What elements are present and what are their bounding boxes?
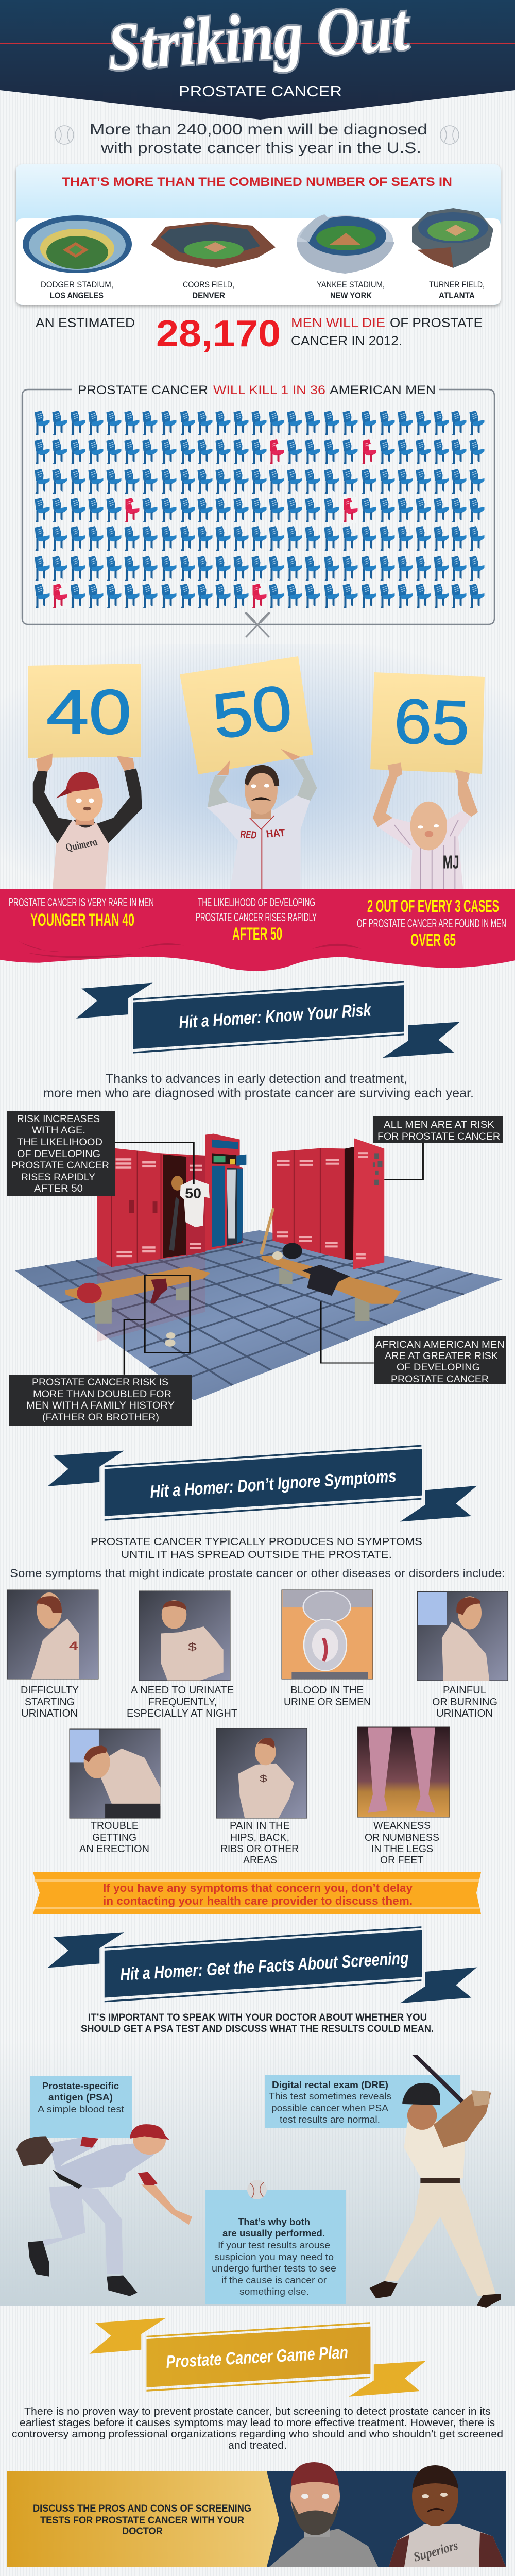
text: speak with your doctor: [81, 2012, 434, 2035]
box: why both: undergo further tests to see: [212, 2263, 336, 2274]
stadium labels: DENVER: [192, 291, 225, 300]
text: over 65: OVER 65: [410, 930, 456, 950]
panel: discuss with your doctor: [7, 2462, 506, 2567]
text: no symptoms statement: UNTIL IT HAS SPREAD OUTSIDE THE PROSTATE.: [121, 1549, 392, 1561]
icon: baseball: [247, 2180, 267, 2199]
symptom: weakness in legs or feet: WEAKNESS: [373, 1820, 431, 1832]
figure: older man: [373, 762, 478, 889]
symptom: blood in urine: [282, 1590, 373, 1708]
symptom: pain in hips, back, ribs: AREAS: [243, 1855, 277, 1866]
symptom: need to urinate frequently: [127, 1591, 237, 1719]
ribbon: age facts: [0, 889, 515, 971]
callout: risk increases with age: RISK INCREASES: [17, 1114, 100, 1125]
callout: risk increases with age: PROSTATE CANCER: [11, 1160, 109, 1171]
symptom: painful urination: URINATION: [436, 1708, 493, 1719]
text: after 50: THE LIKELIHOOD OF DEVELOPING: [198, 895, 315, 909]
callout: family history: MORE THAN DOUBLED FOR: [33, 1389, 171, 1400]
callout: risk increases with age: RISES RAPIDLY: [21, 1172, 95, 1183]
callout: family history: (FATHER OR BROTHER): [42, 1412, 159, 1423]
connector lines: [115, 1142, 423, 1375]
callout: African American men: ARE AT GREATER RISK: [385, 1351, 498, 1362]
symptom: trouble getting an erection: GETTING: [92, 1832, 136, 1843]
text: no symptoms statement: [10, 1536, 505, 1580]
box: why both: are usually performed.: [222, 2228, 325, 2239]
symptom image: [282, 1590, 373, 1679]
jersey: number 50: [180, 1179, 210, 1227]
text: over 65: [357, 896, 506, 950]
text: survival intro: [43, 1072, 474, 1100]
banner: Get the Facts About Screening: Hit a Homer: Get the Facts About Screening: [119, 1948, 409, 1985]
text: game plan paragraph: controversy among professional organizations regarding who should and who shouldn’t get screened: [12, 2429, 503, 2440]
statistic: 28,170 deaths: [36, 313, 483, 354]
callout: African American men: PROSTATE CANCER: [391, 1374, 489, 1385]
callout: contact your provider: If you have any symptoms that concern you, don’t delay: [103, 1882, 413, 1894]
symptom image: $: [260, 1773, 267, 1784]
text: game plan paragraph: There is no proven way to prevent prostate cancer, but screening to detect prostate cancer in its: [24, 2406, 491, 2417]
text: no symptoms statement: PROSTATE CANCER TYPICALLY PRODUCES NO SYMPTOMS: [91, 1536, 422, 1548]
callout: African American men: [374, 1336, 506, 1385]
callout: family history: MEN WITH A FAMILY HISTORY: [26, 1400, 175, 1411]
text: game plan paragraph: earliest stages before it causes symptoms may lead to more effective treatment. However, there is: [20, 2417, 495, 2429]
callout: risk increases with age: AFTER 50: [34, 1183, 83, 1194]
stadium labels: DODGER STADIUM,: [41, 280, 113, 290]
box: why both: That’s why both: [238, 2217, 310, 2227]
symptom: painful urination: PAINFUL: [443, 1685, 486, 1696]
text: game plan paragraph: and treated.: [228, 2440, 287, 2451]
box: DRE: test results are normal.: [280, 2114, 380, 2125]
box: why both: [205, 2180, 346, 2304]
symptom image: [70, 1729, 160, 1818]
panel heading: THAT’S MORE THAN THE COMBINED NUMBER OF SEATS IN: [62, 175, 452, 189]
box: why both: suspicion you may need to: [214, 2252, 334, 2262]
banner: Prostate Cancer Game Plan: [89, 2318, 426, 2397]
symptom: need to urinate frequently: ESPECIALLY AT NIGHT: [127, 1708, 237, 1719]
statistic: 28,170 deaths: 28,170: [156, 313, 281, 354]
header: [0, 0, 515, 120]
stadium: Coors: [151, 222, 276, 268]
panel: age signs and men: [0, 644, 515, 889]
symptom: pain in hips, back, ribs: HIPS, BACK,: [230, 1832, 289, 1843]
panel text: [33, 2503, 251, 2537]
text: under 40: YOUNGER THAN 40: [30, 910, 134, 930]
symptom: weakness in legs or feet: [357, 1727, 450, 1866]
statistic: 28,170 deaths: MEN WILL DIE: [291, 316, 385, 330]
text: survival intro: more men who are diagnosed with prostate cancer are surviving each year.: [43, 1086, 474, 1100]
sign: 40: [28, 664, 141, 758]
chart heading: PROSTATE CANCER: [78, 383, 208, 397]
text: after 50: [196, 895, 317, 944]
banner: Don't Ignore Symptoms: [47, 1445, 477, 1522]
callout: family history: PROSTATE CANCER RISK IS: [32, 1377, 168, 1388]
figure: man in Superiors shirt: Superiors: [412, 2538, 459, 2565]
banner: Know Your Risk: Hit a Homer: Know Your Risk: [178, 1000, 372, 1032]
symptom: painful urination: [417, 1591, 508, 1719]
text: after 50: AFTER 50: [232, 924, 282, 944]
statistic: 28,170 deaths: CANCER IN 2012.: [291, 334, 402, 348]
bat: [260, 1208, 274, 1255]
callout: risk increases with age: [7, 1111, 115, 1196]
sign: 50: 50: [209, 672, 296, 752]
stadium labels: [41, 280, 485, 300]
panel text: DISCUSS THE PROS AND CONS OF SCREENING: [33, 2503, 251, 2514]
stadium labels: LOS ANGELES: [50, 291, 104, 300]
callout: risk increases with age: OF DEVELOPING: [17, 1149, 100, 1160]
box: PSA: [30, 2076, 132, 2138]
statistic: 28,170 deaths: OF PROSTATE: [390, 316, 483, 330]
callout: all men at risk: FOR PROSTATE CANCER: [377, 1131, 500, 1142]
symptom: pain in hips, back, ribs: PAIN IN THE: [230, 1820, 290, 1832]
symptom: weakness in legs or feet: OR NUMBNESS: [365, 1832, 439, 1843]
stadium: Turner: [412, 208, 493, 268]
intro statement: More than 240,000 men will be diagnosed: [90, 121, 427, 138]
panel: stadium seats comparison: [16, 164, 501, 305]
callout: all men at risk: [373, 1116, 503, 1143]
figure: batter: [370, 2055, 501, 2308]
icon: baseball right: [440, 126, 459, 144]
lockers: blue tower: [205, 1133, 246, 1251]
symptom: blood in urine: URINE OR SEMEN: [284, 1697, 371, 1708]
box: PSA: A simple blood test: [38, 2104, 124, 2114]
illustration: locker room: [15, 1133, 503, 1400]
banner: Don't Ignore Symptoms: Hit a Homer: Don’t Ignore Symptoms: [149, 1466, 397, 1502]
stadium: Dodger: [23, 215, 132, 273]
stadium labels: COORS FIELD,: [183, 280, 234, 290]
symptom: pain in hips, back, ribs: RIBS OR OTHER: [220, 1843, 299, 1855]
intro statement: with prostate cancer this year in the U.S.: [100, 140, 421, 157]
box: PSA: antigen (PSA): [48, 2092, 113, 2103]
sign: 65: [370, 672, 485, 774]
panel: screening tests: [0, 2040, 515, 2308]
symptom: pain in hips, back, ribs: [216, 1728, 307, 1866]
sign: 65: 65: [393, 686, 471, 758]
seat pictogram: [35, 411, 484, 609]
jersey: number 50: 50: [185, 1185, 201, 1201]
symptom image: [139, 1591, 230, 1681]
floor: [15, 1230, 503, 1400]
figure: middle-aged man: HAT: [265, 827, 286, 840]
panel: 1 in 36 seat chart: [22, 383, 494, 637]
chart heading: [78, 383, 436, 397]
box: DRE: This test sometimes reveals: [269, 2091, 391, 2102]
figure: bearded man: [269, 2462, 378, 2567]
bench: right: [261, 1243, 401, 1321]
box: DRE: Digital rectal exam (DRE): [272, 2080, 388, 2090]
panel text: DOCTOR: [122, 2526, 163, 2537]
figure: man in Superiors shirt: [389, 2465, 506, 2567]
intro statement: [55, 121, 459, 157]
box: why both: something else.: [239, 2286, 309, 2297]
subtitle: PROSTATE CANCER: [179, 83, 342, 100]
figure: young man: Quimera: [63, 836, 99, 854]
text: game plan paragraph: [12, 2406, 503, 2451]
text: speak with your doctor: SHOULD GET A PSA TEST AND DISCUSS WHAT THE RESULTS COULD MEAN.: [81, 2024, 434, 2035]
symptom: painful urination: OR BURNING: [432, 1697, 497, 1708]
symptom: trouble getting an erection: AN ERECTION: [79, 1843, 149, 1855]
symptom: weakness in legs or feet: OR FEET: [380, 1855, 423, 1866]
chart heading: AMERICAN MEN: [330, 383, 436, 397]
icon: crossed bats: [246, 613, 269, 637]
panel text: TESTS FOR PROSTATE CANCER WITH YOUR: [40, 2515, 244, 2526]
callout: African American men: AFRICAN AMERICAN MEN: [375, 1340, 505, 1350]
callout: African American men: OF DEVELOPING: [397, 1362, 480, 1373]
text: after 50: PROSTATE CANCER RISES RAPIDLY: [196, 910, 317, 924]
symptom: trouble getting an erection: [70, 1729, 160, 1855]
symptom: need to urinate frequently: FREQUENTLY,: [148, 1697, 217, 1708]
bench: left: [65, 1266, 210, 1347]
symptom image: [417, 1591, 508, 1681]
stadium labels: ATLANTA: [439, 291, 475, 300]
statistic: 28,170 deaths: AN ESTIMATED: [36, 316, 135, 330]
chart heading: WILL KILL 1 IN 36: [213, 383, 325, 397]
box: DRE: possible cancer when PSA: [271, 2103, 388, 2113]
callout: contact your provider: [33, 1872, 481, 1914]
banner: Get the Facts About Screening: [47, 1926, 477, 2003]
figure: middle-aged man: [207, 749, 317, 889]
sign: 40: 40: [46, 677, 131, 747]
lockers: right bank: [272, 1138, 384, 1269]
banner: Prostate Cancer Game Plan: Prostate Cancer Game Plan: [165, 2343, 349, 2372]
symptom image: 4: [69, 1639, 78, 1652]
icon: baseball left: [55, 126, 74, 144]
box: why both: if the cause is cancer or: [221, 2275, 327, 2285]
figure: young man: [33, 753, 142, 889]
sign: 50: [180, 656, 313, 774]
box: DRE: [265, 2075, 460, 2128]
symptom: need to urinate frequently: A NEED TO URINATE: [131, 1685, 234, 1696]
callout: contact your provider: in contacting your health care provider to discuss them.: [103, 1894, 413, 1907]
symptom: weakness in legs or feet: IN THE LEGS: [371, 1843, 433, 1855]
text: survival intro: Thanks to advances in early detection and treatment,: [106, 1072, 407, 1086]
text: speak with your doctor: IT’S IMPORTANT TO SPEAK WITH YOUR DOCTOR ABOUT WHETHER YOU: [88, 2012, 427, 2023]
stadium labels: TURNER FIELD,: [429, 280, 485, 290]
figure: pitcher: [16, 2124, 192, 2296]
text: no symptoms statement: Some symptoms that might indicate prostate cancer or other diseases or disorders include:: [10, 1567, 505, 1580]
lockers: left bank: [97, 1146, 205, 1267]
symptom image: [357, 1727, 450, 1817]
symptom image: $: [188, 1641, 197, 1653]
symptom image: [216, 1728, 307, 1818]
callout: all men at risk: ALL MEN ARE AT RISK: [384, 1120, 494, 1130]
text: under 40: [9, 895, 154, 930]
symptom: difficulty starting urination: DIFFICULTY: [21, 1685, 79, 1696]
symptom image: [7, 1590, 98, 1679]
box: PSA: Prostate-specific: [42, 2081, 119, 2091]
symptom: difficulty starting urination: URINATION: [21, 1708, 78, 1719]
symptom: difficulty starting urination: STARTING: [25, 1697, 75, 1708]
stadium labels: NEW YORK: [330, 291, 372, 300]
text: under 40: PROSTATE CANCER IS VERY RARE IN MEN: [9, 895, 154, 909]
banner: Know Your Risk: [76, 981, 460, 1058]
callout: family history: [9, 1375, 192, 1426]
stadium labels: YANKEE STADIUM,: [317, 280, 385, 290]
symptom: blood in urine: BLOOD IN THE: [290, 1685, 364, 1696]
callout: risk increases with age: THE LIKELIHOOD: [17, 1137, 102, 1148]
callout: risk increases with age: WITH AGE.: [32, 1125, 85, 1136]
stadium: Yankee: [297, 214, 394, 274]
symptom: difficulty starting urination: [7, 1590, 98, 1719]
figure: middle-aged man: RED: [239, 828, 258, 841]
box: why both: If your test results arouse: [218, 2240, 330, 2250]
figure: older man: MJ: [443, 852, 459, 873]
symptom: trouble getting an erection: TROUBLE: [91, 1820, 139, 1832]
